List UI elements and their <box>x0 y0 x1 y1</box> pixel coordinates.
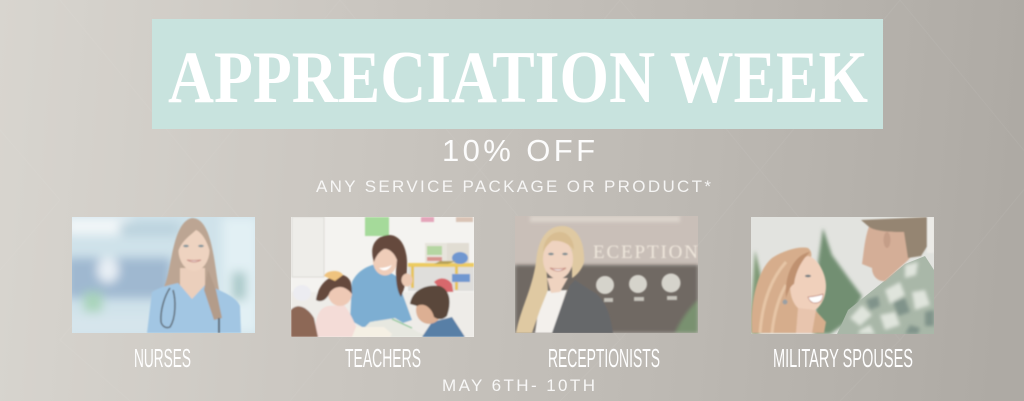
title: APPRECIATION WEEK <box>168 37 868 119</box>
date line: MAY 6TH- 10TH <box>442 376 595 395</box>
photo: nurse <box>66 217 258 336</box>
label: receptionists: RECEPTIONISTS <box>548 343 660 373</box>
discount details: ANY SERVICE PACKAGE OR PRODUCT* <box>316 177 711 196</box>
label: military spouses: MILITARY SPOUSES <box>773 343 913 373</box>
photo: military spouses <box>751 217 940 340</box>
title banner <box>152 19 883 129</box>
photo: teacher and children <box>291 217 474 337</box>
label: nurses: NURSES <box>134 343 191 373</box>
label: teachers: TEACHERS <box>345 343 421 373</box>
photo: receptionist <box>515 216 698 333</box>
sign lettering: ECEPTION <box>593 242 698 263</box>
discount headline: 10% OFF <box>442 133 595 168</box>
